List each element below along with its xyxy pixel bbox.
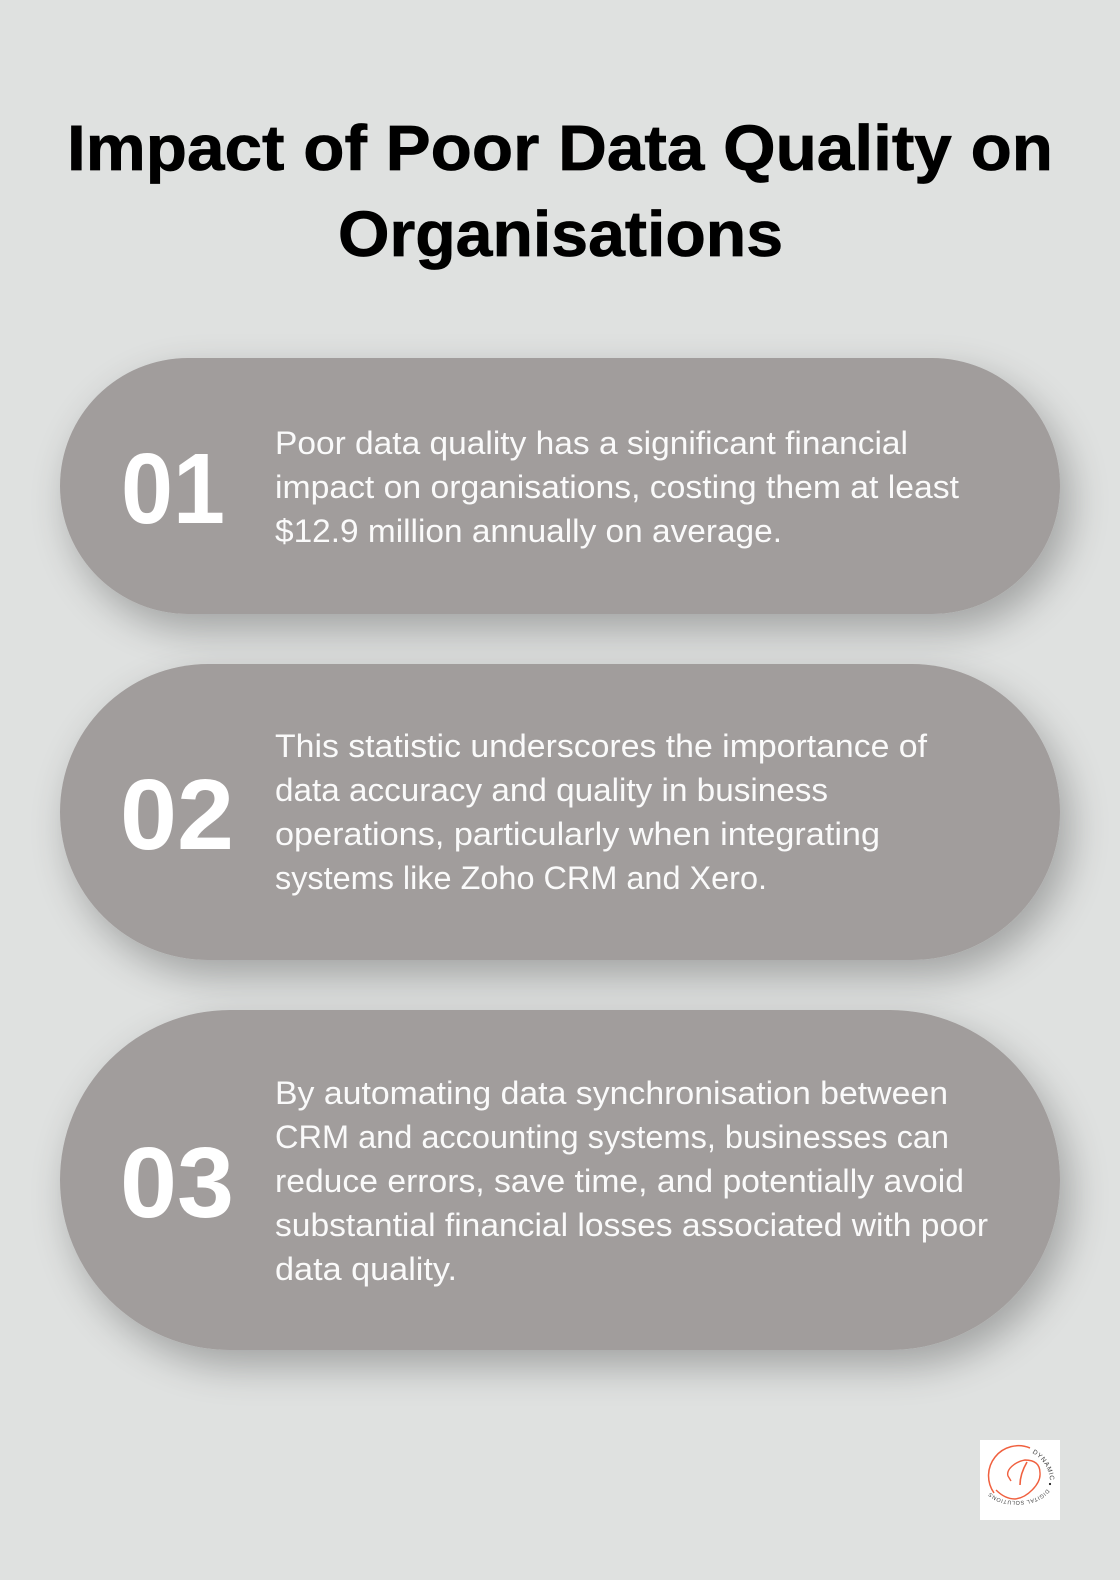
text block 02: data accuracy and quality in business xyxy=(275,772,828,808)
text block 03: CRM and accounting systems, businesses can xyxy=(275,1119,949,1155)
text block 03 xyxy=(275,1075,988,1287)
number 02: 02 xyxy=(120,759,234,871)
text block 01: impact on organisations, costing them at least xyxy=(275,469,959,505)
text block 03: reduce errors, save time, and potentially avoid xyxy=(275,1163,964,1199)
icon: company logo xyxy=(980,1440,1060,1520)
number 01: 01 xyxy=(121,433,225,545)
text block 03: substantial financial losses associated with poor xyxy=(275,1207,988,1243)
icon: company logo: DIGITAL SOLUTIONS xyxy=(988,1489,1050,1505)
text block 02: operations, particularly when integrating xyxy=(275,816,880,852)
title: Organisations xyxy=(338,198,783,270)
panel: point 03 xyxy=(60,1010,1060,1350)
text block 01 xyxy=(275,425,959,549)
panel: point 01 xyxy=(60,358,1060,614)
text block 02: This statistic underscores the importance of xyxy=(275,728,927,764)
text block 02: systems like Zoho CRM and Xero. xyxy=(275,860,767,896)
title: Impact of Poor Data Quality on xyxy=(67,112,1053,184)
icon: company logo: DYNAMIC xyxy=(1032,1449,1054,1480)
text block 03: By automating data synchronisation between xyxy=(275,1075,948,1111)
number 03: 03 xyxy=(120,1127,234,1239)
title xyxy=(67,112,1053,270)
text block 02 xyxy=(275,728,927,896)
text block 03: data quality. xyxy=(275,1251,457,1287)
panel: point 02 xyxy=(60,664,1060,960)
text block 01: Poor data quality has a significant financial xyxy=(275,425,908,461)
text block 01: $12.9 million annually on average. xyxy=(275,513,782,549)
